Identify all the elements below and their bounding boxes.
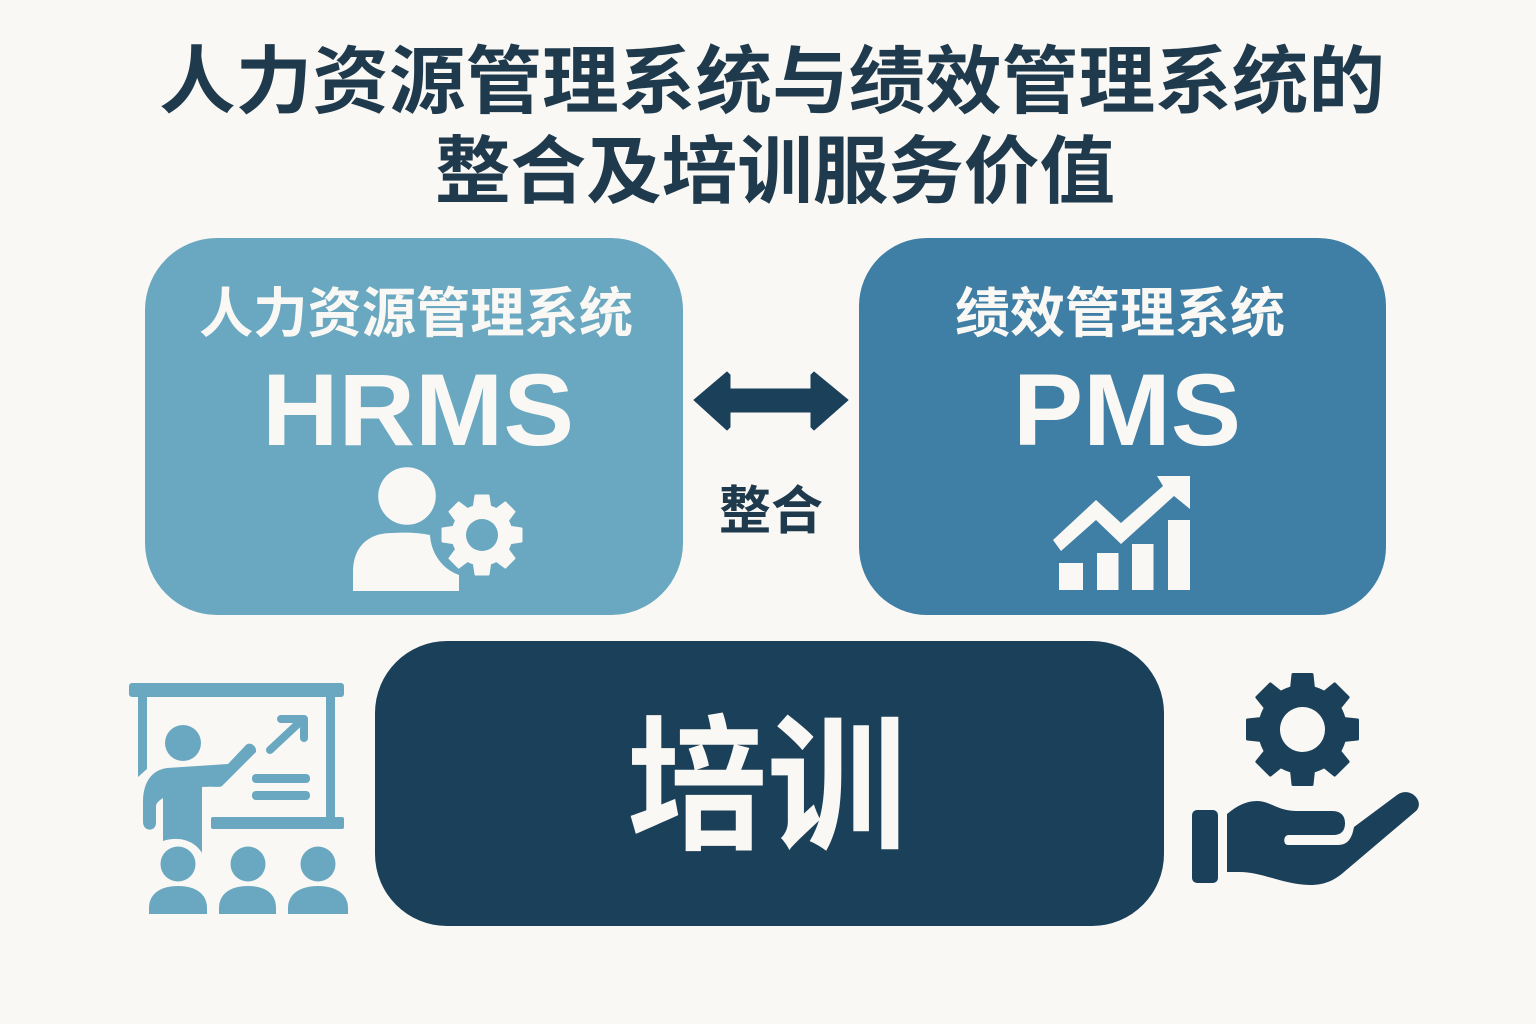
title: 人力资源管理系统与绩效管理系统的 bbox=[159, 40, 1385, 123]
HRMS label: HRMS bbox=[262, 353, 574, 467]
icon: hand holding gear bbox=[1192, 674, 1419, 885]
icon: growth chart bbox=[1053, 476, 1190, 590]
panel: HRMS bbox=[145, 238, 683, 615]
panel: PMS bbox=[859, 238, 1386, 615]
PMS label: PMS bbox=[1013, 353, 1241, 467]
panel: training bbox=[375, 641, 1164, 926]
training label: 培训 bbox=[627, 706, 907, 870]
integration label: 整合 bbox=[719, 483, 823, 541]
title: 整合及培训服务价值 bbox=[435, 130, 1115, 213]
HRMS Chinese heading: 人力资源管理系统 bbox=[199, 284, 633, 344]
PMS Chinese heading: 绩效管理系统 bbox=[955, 284, 1285, 344]
arrow: integration bbox=[694, 372, 848, 430]
icon: presenter and audience bbox=[129, 683, 348, 914]
title bbox=[159, 40, 1385, 213]
icon: person with gear bbox=[353, 467, 522, 591]
